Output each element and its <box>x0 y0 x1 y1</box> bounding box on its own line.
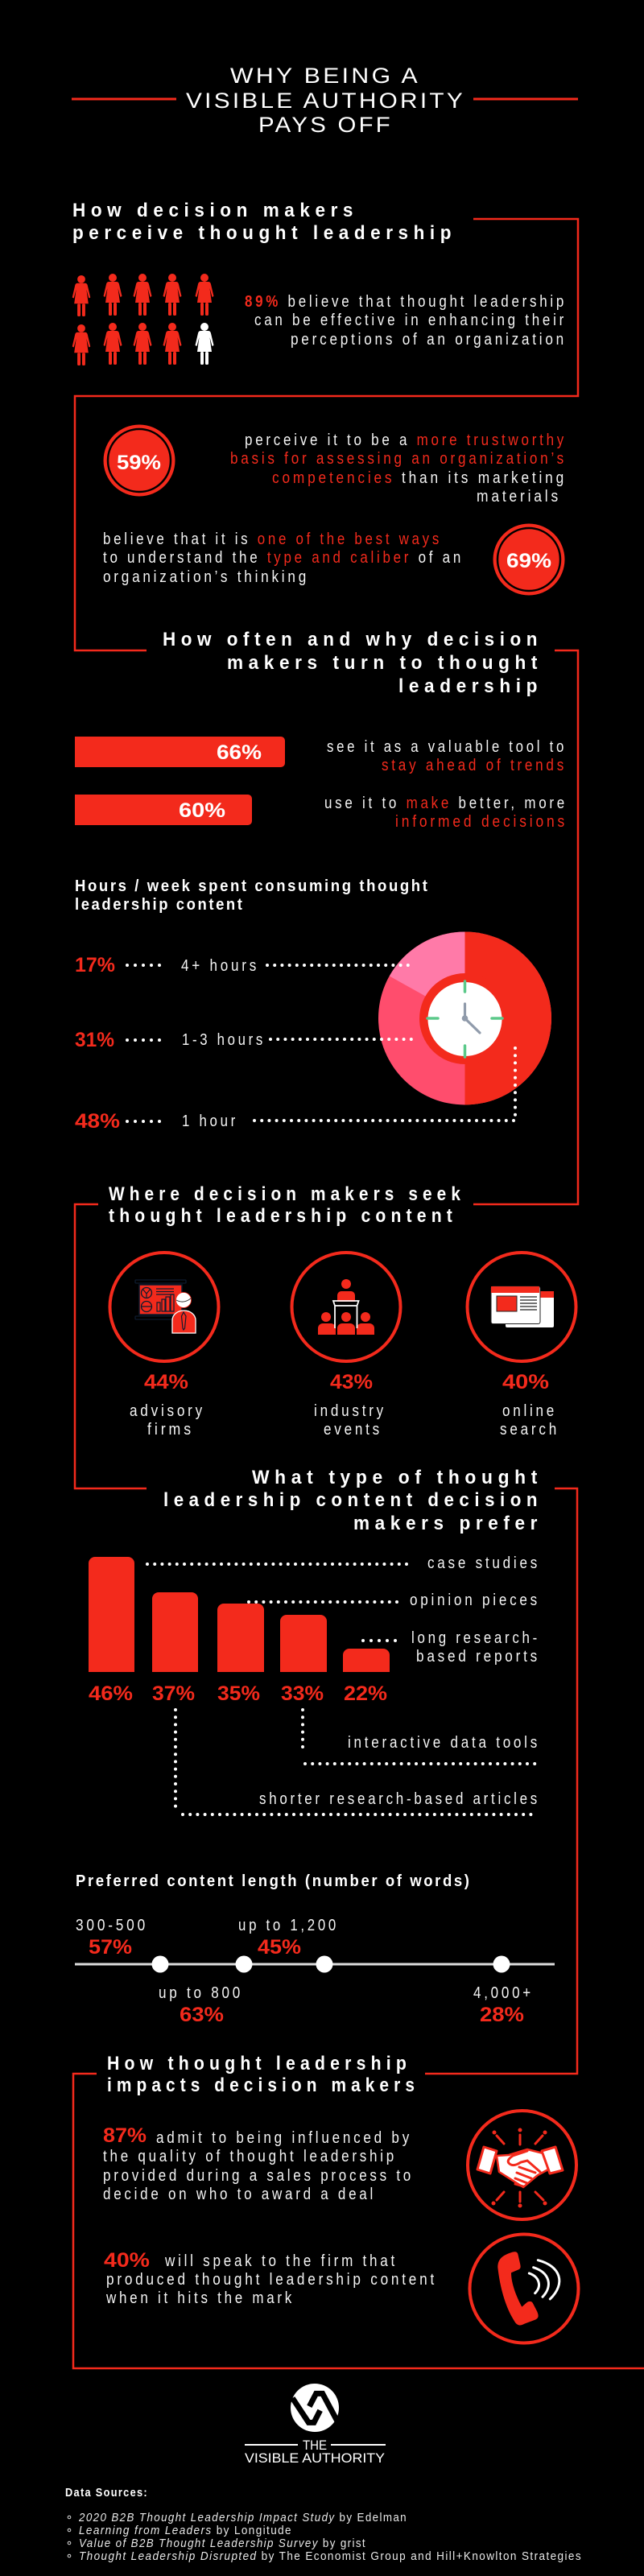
text: 40% will speak: when it hits the mark <box>105 2289 295 2307</box>
heading: how thought leadership impacts: impacts decision makers <box>107 2074 419 2096</box>
heading: how decision makers perceive thought leadership: How decision makers <box>72 200 358 221</box>
icon: handshake <box>468 2111 576 2219</box>
heading: where decision makers seek: thought leadership content <box>109 1205 457 1227</box>
text: 40% will speak: will speak to the firm that <box>164 2252 398 2270</box>
text: 59% perceive: basis for assessing an organization’s <box>230 450 567 468</box>
source: industry events <box>291 1253 401 1361</box>
data sources: Data Sources: <box>65 2487 148 2500</box>
timeline: content length: 4,000+ <box>473 1984 534 2002</box>
heading: how often and why: makers turn to thought <box>227 652 543 674</box>
subheading: hours per week <box>75 877 430 914</box>
bar chart: content types: 22% <box>344 1682 387 1705</box>
title <box>72 64 578 137</box>
badge: 59%: 59% <box>117 452 161 474</box>
text: informed decisions: use it to make better, more <box>324 795 568 812</box>
icon: browser windows <box>491 1286 554 1327</box>
text: stay ahead of trends: see it as a valuable tool to <box>327 738 567 756</box>
bar: 66% <box>75 737 285 767</box>
stat: 44% advisory firms <box>130 1371 205 1439</box>
heading: where decision makers seek: Where decision makers seek <box>109 1183 465 1205</box>
stat: 44% advisory firms: advisory <box>130 1402 205 1420</box>
data sources <box>65 2487 582 2563</box>
text: 40% will speak <box>104 2249 437 2307</box>
legend: 31% 1-3 hours: 31% <box>75 1029 114 1051</box>
label: long research-based reports: long research- <box>411 1629 540 1647</box>
section connector frame <box>73 219 644 2368</box>
heading: how often and why <box>163 629 543 697</box>
text: 40% will speak: 40% <box>104 2249 150 2272</box>
bar chart: content types: 35% <box>217 1682 260 1705</box>
icon: speaker at podium with audience <box>318 1279 374 1335</box>
heading: how often and why: How often and why decision <box>163 629 543 650</box>
stat: 40% online search: 40% <box>502 1371 549 1393</box>
stat: 43% industry events: 43% <box>330 1371 373 1393</box>
legend: 48% 1 hour: 48% <box>75 1110 120 1133</box>
heading: how often and why: leadership <box>398 675 543 697</box>
stat: 44% advisory firms: 44% <box>144 1371 188 1393</box>
legend: 48% 1 hour: 1 hour <box>182 1113 238 1130</box>
text: 87% admit: provided during a sales process to <box>103 2167 414 2185</box>
label: opinion pieces: opinion pieces <box>410 1591 540 1609</box>
timeline: content length: 63% <box>180 2004 224 2026</box>
timeline: content length: up to 1,200 <box>238 1917 339 1934</box>
badge: 69%: 69% <box>506 550 551 572</box>
stat: 40% online search <box>500 1371 559 1439</box>
bar chart: content types: 37% <box>152 1682 195 1705</box>
text: 59% perceive: materials <box>477 488 561 506</box>
clock face <box>419 973 510 1064</box>
text: 69% believe: to understand the type and caliber of an <box>103 549 464 567</box>
label: shorter research-based articles: shorter research-based articles <box>259 1790 540 1808</box>
legend: 17% 4+ hours: 17% <box>75 954 115 976</box>
timeline: content length: up to 800 <box>159 1984 243 2002</box>
data sources: Learning from Leaders by Longitude <box>79 2524 292 2537</box>
title: PAYS OFF <box>258 113 393 137</box>
bar: 60%: 60% <box>179 799 225 822</box>
legend: 31% 1-3 hours: 1-3 hours <box>182 1031 266 1049</box>
heading: what type of content: makers prefer <box>353 1513 543 1534</box>
icon: ten people, nine of them red <box>72 274 213 365</box>
stat: 44% advisory firms: firms <box>147 1421 194 1439</box>
text: 89% believe <box>245 293 567 349</box>
text: 69% believe <box>103 530 464 586</box>
text: 87% admit: the quality of thought leadership <box>103 2148 397 2165</box>
subheading: hours per week: leadership content <box>75 896 245 914</box>
badge: 59% <box>103 425 175 496</box>
text: 87% admit: admit to being influenced by <box>156 2129 412 2147</box>
text: 40% will speak: produced thought leadership content <box>106 2271 437 2289</box>
logo: the visible authority: VISIBLE AUTHORITY <box>245 2451 385 2466</box>
heading: how thought leadership impacts <box>107 2053 419 2096</box>
stat: 40% online search: online <box>502 1402 557 1420</box>
data sources: 2020 B2B Thought Leadership Impact Study by Edelman <box>78 2512 407 2524</box>
heading: what type of content <box>163 1467 543 1534</box>
data sources: Thought Leadership Disrupted by The Economist Group and Hill+Knowlton Strategies <box>79 2550 582 2563</box>
heading: how decision makers perceive thought leadership: perceive thought leadership <box>72 222 456 244</box>
donut chart with clock <box>378 932 551 1104</box>
bar: 66%: 66% <box>217 741 262 764</box>
timeline: content length <box>75 1917 555 2026</box>
heading: what type of content: leadership content decision <box>163 1489 543 1511</box>
stat: 40% online search: search <box>500 1421 559 1439</box>
heading: how decision makers perceive thought leadership <box>72 200 456 244</box>
text: stay ahead of trends <box>327 738 567 774</box>
stat: 43% industry events: events <box>324 1421 382 1439</box>
text: 87% admit: 87% <box>103 2124 147 2147</box>
text: stay ahead of trends: stay ahead of trends <box>382 757 567 774</box>
text: 59% perceive: competencies than its marketing <box>272 469 567 487</box>
icon: phone <box>470 2235 578 2343</box>
text: informed decisions <box>324 795 568 831</box>
text: 89% believe: 89% believe that thought leadership <box>245 293 567 311</box>
heading: how thought leadership impacts: How thought leadership <box>107 2053 411 2074</box>
bar chart: content types <box>89 1557 390 1705</box>
text: 87% admit <box>103 2124 414 2203</box>
legend: 17% 4+ hours <box>75 954 415 976</box>
timeline: content length: 45% <box>258 1936 301 1959</box>
label: long research-based reports: based reports <box>416 1648 540 1666</box>
bar chart: content types: 33% <box>281 1682 324 1705</box>
title: VISIBLE AUTHORITY <box>186 89 465 113</box>
subheading: hours per week: Hours / week spent consuming thought <box>75 877 430 895</box>
bar chart: content types: 46% <box>89 1682 133 1705</box>
text: 59% perceive: perceive it to be a more trustworthy <box>245 431 567 449</box>
text: 69% believe: organization’s thinking <box>103 568 309 586</box>
text: 87% admit: decide on who to award a deal <box>103 2186 376 2203</box>
timeline: content length: 300-500 <box>76 1917 148 1934</box>
text: 89% believe: can be effective in enhancing their <box>254 312 567 329</box>
title: WHY BEING A <box>230 64 420 88</box>
legend: 31% 1-3 hours <box>75 1029 411 1051</box>
subheading: preferred content length: Preferred content length (number of words) <box>76 1872 472 1890</box>
text: 89% believe: perceptions of an organization <box>291 331 567 349</box>
bar: 60% <box>75 795 252 825</box>
data sources: Value of B2B Thought Leadership Survey by grist <box>79 2537 366 2550</box>
text: 59% perceive <box>230 431 567 506</box>
logo: the visible authority <box>245 2384 386 2466</box>
legend: 17% 4+ hours: 4+ hours <box>181 957 259 975</box>
icon: presenter at board <box>135 1280 196 1333</box>
text: 69% believe: believe that it is one of the best ways <box>103 530 442 548</box>
label: interactive data tools: interactive data tools <box>348 1734 540 1752</box>
text: informed decisions: informed decisions <box>395 813 568 831</box>
heading: where decision makers seek <box>109 1183 465 1227</box>
label: case studies: case studies <box>427 1554 540 1572</box>
source: advisory firms <box>109 1253 219 1361</box>
timeline: content length: 28% <box>480 2004 524 2026</box>
stat: 43% industry events <box>314 1371 386 1439</box>
badge: 69% <box>493 523 565 596</box>
timeline: content length: 57% <box>89 1936 132 1959</box>
label: long research-based reports <box>363 1629 540 1666</box>
stat: 43% industry events: industry <box>314 1402 386 1420</box>
logo: the visible authority: THE <box>303 2438 327 2453</box>
legend: 48% 1 hour <box>75 1041 515 1133</box>
source: online search <box>467 1253 576 1361</box>
heading: what type of content: What type of thought <box>252 1467 543 1488</box>
